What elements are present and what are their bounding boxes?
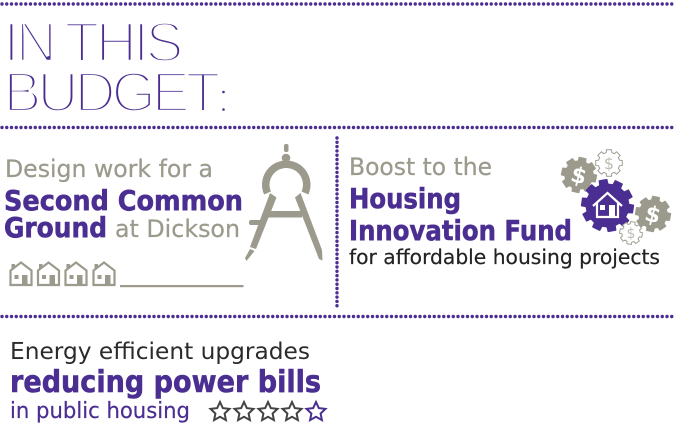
icon: drafting compass — [245, 144, 322, 261]
text: housing innovation fund heading — [349, 153, 660, 269]
icon: gears with house and dollar signs: $ — [568, 162, 589, 191]
text: housing innovation fund heading: Innovation Fund — [349, 214, 572, 247]
top dotted divider — [2, 2, 674, 6]
icon: gears with house and dollar signs: $ — [604, 154, 614, 173]
text: design work heading — [4, 155, 243, 244]
text: energy upgrades — [10, 339, 321, 424]
text: housing innovation fund heading: Boost to the — [349, 153, 492, 181]
text: design work heading: at Dickson — [115, 215, 240, 243]
text: energy upgrades: reducing power bills — [10, 365, 321, 400]
text: housing innovation fund heading: Housing — [349, 182, 461, 215]
text: design work heading: Design work for a — [5, 155, 213, 183]
title — [4, 10, 225, 124]
title: BUDGET — [4, 60, 220, 124]
title: IN THIS — [4, 10, 184, 74]
icon: five star rating — [210, 402, 326, 420]
panel: energy efficient upgrades — [10, 339, 326, 424]
icon: gears with house and dollar signs: $ — [642, 201, 663, 230]
icon: gears with house and dollar signs: $ — [627, 226, 635, 242]
text: design work heading: Second Common — [4, 184, 243, 217]
text: energy upgrades: Energy efficient upgrades — [10, 339, 310, 365]
panel: second common ground — [4, 144, 322, 287]
text: design work heading: Ground — [4, 211, 107, 244]
icon: gears with house and dollar signs — [559, 150, 673, 246]
icon: row of houses with blank line — [10, 262, 244, 287]
text: energy upgrades: in public housing — [10, 399, 190, 424]
panel: housing innovation fund — [349, 150, 673, 269]
text: housing innovation fund heading: for affordable housing projects — [349, 245, 660, 269]
